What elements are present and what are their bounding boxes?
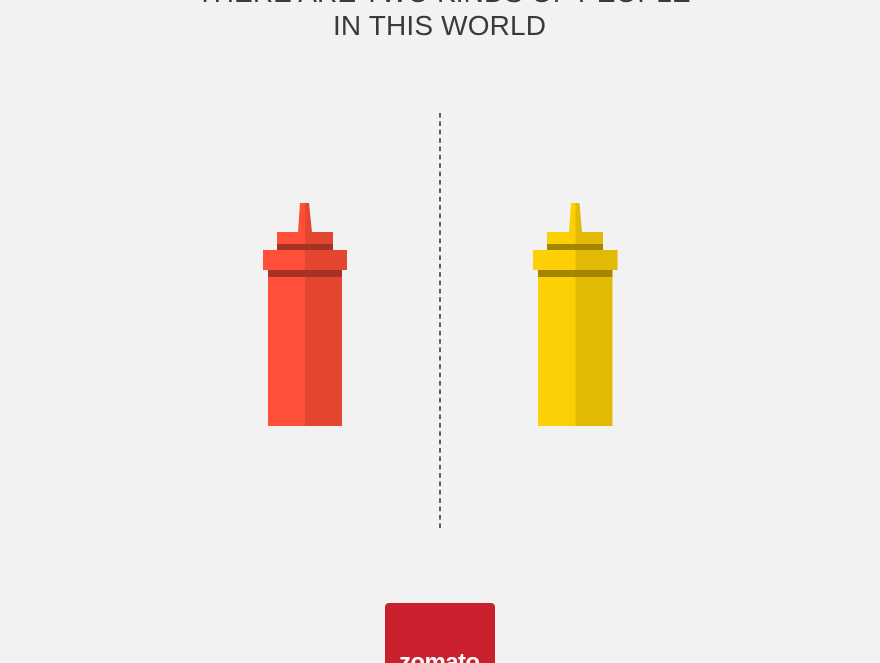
title <box>196 0 690 41</box>
dashed divider <box>439 113 441 528</box>
icon: red ketchup bottle <box>263 203 347 426</box>
logo: zomato <box>385 603 495 663</box>
title: IN THIS WORLD <box>333 10 546 41</box>
icon: yellow mustard bottle <box>533 203 618 426</box>
